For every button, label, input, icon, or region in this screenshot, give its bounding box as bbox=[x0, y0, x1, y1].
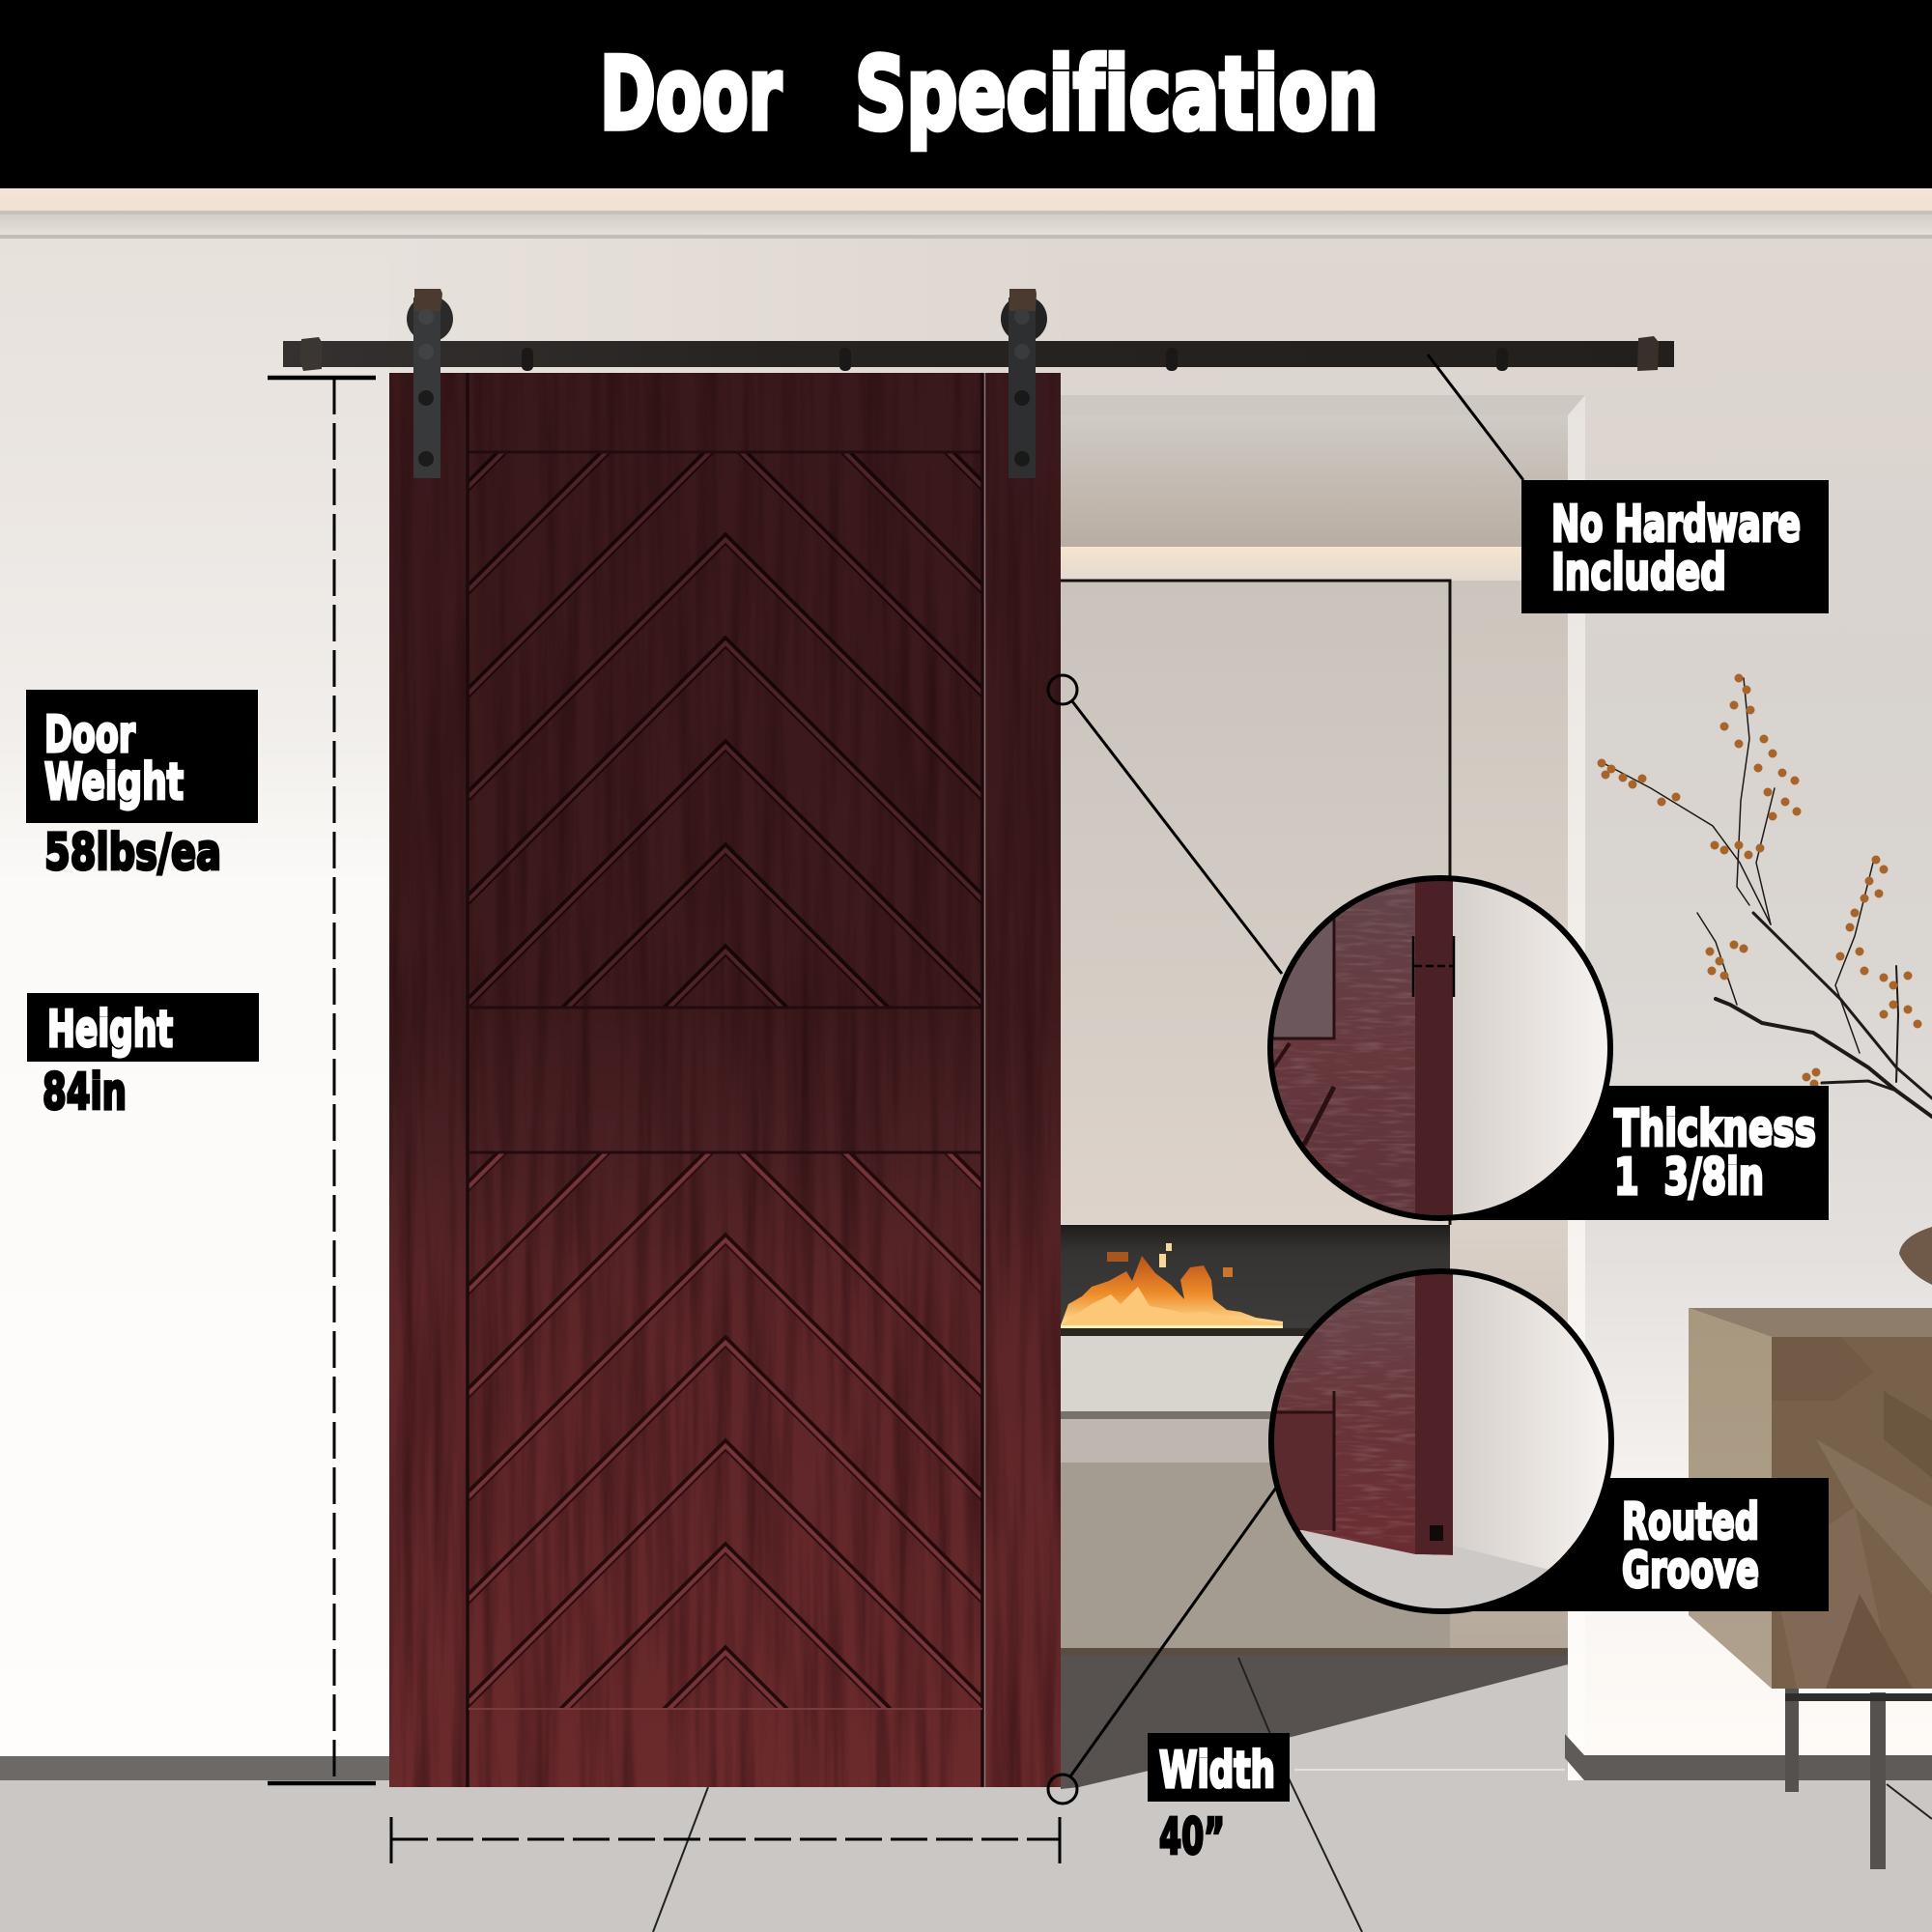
right hanger bbox=[1001, 289, 1047, 478]
thickness text bbox=[1614, 1100, 1816, 1207]
sofa and rug area bbox=[1061, 1419, 1568, 1656]
routed groove text: Groove bbox=[1622, 1542, 1759, 1600]
label: routed groove bbox=[1439, 1478, 1829, 1611]
label: no hardware included bbox=[1521, 480, 1829, 613]
callout marker: width and groove bbox=[1048, 1488, 1276, 1804]
leader line: hardware bbox=[1428, 355, 1523, 480]
rail bolts bbox=[522, 348, 1508, 371]
callout marker: thickness bbox=[1048, 675, 1282, 974]
doorway frame lines bbox=[1061, 581, 1450, 1225]
routed groove text bbox=[1622, 1493, 1759, 1600]
barn door bbox=[389, 373, 1061, 1787]
label: width: 40” bbox=[1159, 1808, 1225, 1866]
credenza bbox=[1689, 1308, 1932, 1689]
skirting boards bbox=[0, 1734, 1932, 1780]
label: door weight: Door bbox=[44, 706, 135, 764]
floor bbox=[0, 1656, 1932, 1932]
thickness text: Thickness bbox=[1614, 1100, 1816, 1158]
label: door weight: 58lbs/ea bbox=[44, 824, 221, 882]
vase bbox=[1899, 1227, 1932, 1285]
fireplace bbox=[1061, 1225, 1450, 1419]
left end stop bbox=[299, 337, 322, 371]
label: height bbox=[27, 993, 259, 1122]
background: left wall bbox=[0, 239, 1063, 1784]
label: width: Width bbox=[1159, 1742, 1275, 1800]
label: thickness bbox=[1439, 1086, 1829, 1220]
label: height: Height bbox=[47, 1001, 173, 1059]
ceiling cove bbox=[0, 188, 1932, 239]
title bbox=[600, 37, 1378, 153]
door wood grain bbox=[389, 373, 1061, 1787]
thickness text: 1 3/8in bbox=[1614, 1149, 1764, 1207]
height dimension line bbox=[268, 378, 376, 1783]
flames bbox=[1061, 1243, 1283, 1328]
title: Door bbox=[600, 37, 781, 153]
left hanger bbox=[407, 289, 453, 478]
label: width bbox=[1148, 1733, 1290, 1866]
door rails and stiles seams bbox=[468, 373, 985, 1787]
sliding track rail bbox=[283, 336, 1674, 371]
label: height: 84in bbox=[43, 1064, 127, 1122]
label: no hardware included: Included bbox=[1551, 544, 1726, 602]
background: wall above door bbox=[389, 239, 1061, 374]
routed groove text: Routed bbox=[1622, 1493, 1759, 1551]
zoom circle: routed groove detail bbox=[1265, 1265, 1613, 1623]
background: right wall bbox=[1061, 239, 1932, 1784]
header bar bbox=[0, 0, 1932, 188]
credenza legs bbox=[1785, 1689, 1932, 1869]
zoom circle: door thickness detail bbox=[1256, 869, 1610, 1227]
title: Specification bbox=[855, 37, 1378, 153]
label: door weight: Weight bbox=[44, 753, 184, 811]
chevron grooves lower panel bbox=[469, 1153, 981, 1708]
right end stop bbox=[1637, 336, 1659, 371]
width dimension line bbox=[391, 1817, 1060, 1863]
chevron grooves upper panel bbox=[469, 454, 981, 1007]
label: no hardware included: No Hardware bbox=[1551, 496, 1801, 554]
room opening seen through the doorway bbox=[1061, 395, 1585, 1753]
label: door weight bbox=[26, 690, 258, 882]
decorative branches with berries bbox=[1598, 674, 1932, 1117]
